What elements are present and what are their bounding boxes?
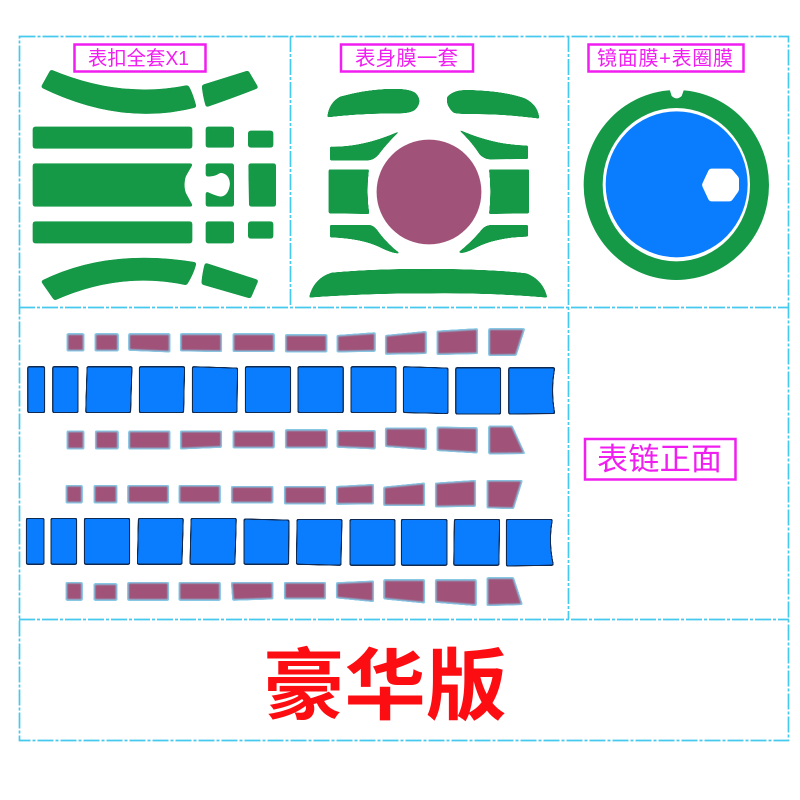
bracelet upper strip, bottom pink row <box>67 426 524 454</box>
label: clasp set <box>74 44 206 72</box>
bezel ring and lens <box>584 89 769 280</box>
panel: clasp film set <box>33 44 276 301</box>
label: case set: 表身膜一套 <box>355 47 458 70</box>
bracelet lower strip, bottom pink row <box>66 578 522 605</box>
case centre circle <box>377 140 481 244</box>
label: lens and bezel: 镜面膜+表圈膜 <box>597 47 733 70</box>
panel: bracelet front films <box>27 329 554 605</box>
panel: lens and bezel film <box>584 44 769 280</box>
label: clasp set: 表扣全套X1 <box>88 47 189 70</box>
case film pieces <box>309 89 547 298</box>
bracelet lower strip, blue links <box>27 519 553 565</box>
panel: case film set <box>309 44 547 298</box>
title: deluxe edition: 豪华版 <box>263 642 507 730</box>
bracelet lower strip, top pink row <box>66 481 522 508</box>
bracelet upper strip, blue links <box>28 367 554 413</box>
clasp film pieces <box>33 69 276 301</box>
label: bracelet front: 表链正面 <box>597 442 722 477</box>
bracelet upper strip, top pink row <box>67 329 524 355</box>
label: case set <box>341 44 473 72</box>
